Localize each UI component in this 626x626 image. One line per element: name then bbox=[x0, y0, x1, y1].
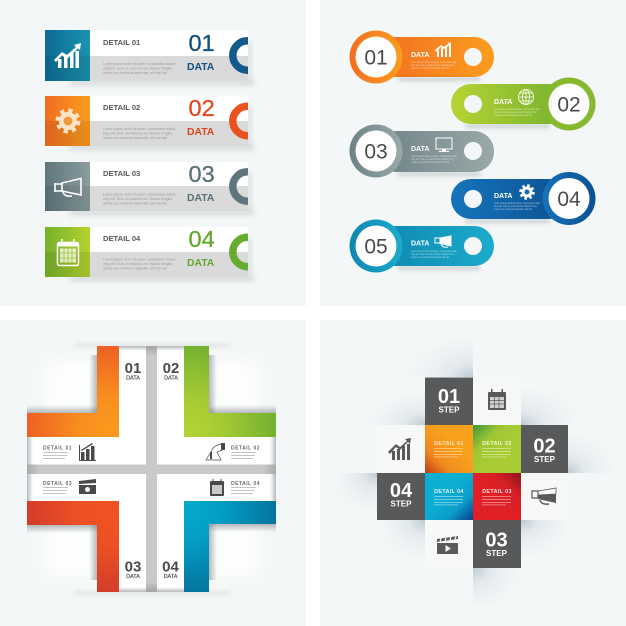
icon: megaphone bbox=[532, 488, 556, 504]
icon: megaphone bbox=[55, 178, 81, 196]
icon: growth chart bbox=[388, 438, 411, 460]
icon: megaphone bbox=[435, 236, 451, 247]
pill 03: DATA bbox=[411, 146, 429, 153]
pill 05 bbox=[350, 220, 494, 272]
tile detail 02 bbox=[473, 425, 521, 473]
pill 03 bbox=[350, 124, 494, 178]
pill 05: DATA bbox=[411, 240, 429, 248]
card 03 bbox=[45, 161, 262, 215]
icon: monitor bbox=[436, 138, 452, 152]
tile 03: 03 bbox=[485, 530, 508, 552]
card 04: 04 bbox=[188, 226, 215, 252]
number labels: 02 bbox=[163, 360, 179, 377]
pill 05: Lorem ipsum dolor sit amet, consectetur adip bbox=[411, 250, 458, 253]
pill 01: 01 bbox=[364, 46, 388, 70]
card 01: cing elit. Duis ut euismod dui. Mauris fringilla, bbox=[103, 66, 173, 70]
card 04: Lorem ipsum dolor sit amet, consectetur adipis bbox=[103, 258, 176, 262]
card 01: Lorem ipsum dolor sit amet, consectetur adipis bbox=[103, 62, 176, 66]
tile detail 03: DETAIL 03 bbox=[482, 489, 512, 495]
panel: detail cards bbox=[45, 30, 262, 281]
ring bbox=[229, 168, 248, 205]
ring bbox=[229, 102, 248, 140]
pill 04: metus nec vehicula imperdiet, elit nisi bbox=[494, 208, 533, 211]
tile 02: STEP bbox=[534, 455, 556, 464]
card 02: cing elit. Duis ut euismod dui. Mauris fringilla, bbox=[103, 132, 173, 136]
icon: calendar bbox=[488, 389, 506, 410]
detail 02: DETAIL 02 bbox=[231, 446, 260, 452]
icon: clapperboard bbox=[79, 479, 96, 494]
icon: gear bbox=[520, 186, 534, 198]
icon: clapperboard bbox=[437, 536, 458, 554]
pill 05: 05 bbox=[364, 236, 388, 258]
card 01: 01 bbox=[188, 30, 215, 56]
card 04 bbox=[45, 226, 262, 281]
detail 03 bbox=[43, 479, 96, 494]
card 01 bbox=[45, 30, 262, 85]
number labels: 03 bbox=[125, 558, 141, 576]
tile 01: 01 bbox=[438, 386, 460, 408]
pill 01 bbox=[350, 30, 494, 84]
tile 03 bbox=[473, 520, 521, 568]
tile 03: STEP bbox=[486, 549, 508, 558]
corner: red bbox=[27, 501, 119, 592]
pill 04 bbox=[451, 172, 596, 225]
tile detail 01: DETAIL 01 bbox=[434, 441, 464, 447]
pill 02: DATA bbox=[494, 99, 512, 106]
ring bbox=[229, 37, 248, 74]
tile detail 04: DETAIL 04 bbox=[434, 489, 464, 495]
corner: orange bbox=[27, 346, 119, 437]
detail 03: DETAIL 03 bbox=[43, 481, 72, 487]
icon: globe bbox=[518, 90, 534, 104]
icon: hand voting bbox=[206, 443, 225, 460]
detail 04 bbox=[210, 479, 260, 496]
number labels: DATA bbox=[164, 376, 178, 382]
pill 01: Lorem ipsum dolor sit amet, consectetur adip bbox=[411, 61, 458, 64]
corner: blue bbox=[184, 501, 276, 592]
number labels bbox=[125, 360, 179, 580]
detail 01 bbox=[43, 443, 96, 461]
corner: green bbox=[184, 346, 276, 437]
tile detail 04 bbox=[425, 473, 473, 520]
tile 04: 04 bbox=[390, 480, 413, 502]
pill 02 bbox=[451, 78, 596, 130]
tile 04: STEP bbox=[391, 500, 412, 508]
pill 05: cing elit. Duis ut euismod dui. Mauris fring bbox=[411, 253, 454, 256]
card 03: metus nec vehicula imperdiet, elit nisi fab bbox=[103, 202, 167, 206]
number labels: DATA bbox=[126, 376, 140, 382]
tile 04 bbox=[377, 473, 425, 520]
card 01: metus nec vehicula imperdiet, elit nisi fab bbox=[103, 71, 167, 75]
card 01: DETAIL 01 bbox=[103, 38, 141, 47]
panel: cross layout bbox=[27, 344, 276, 594]
icon: growth chart bbox=[54, 43, 81, 68]
card 04: metus nec vehicula imperdiet, elit nisi fab bbox=[103, 266, 167, 270]
icon: calendar bbox=[58, 239, 78, 266]
pill 03: cing elit. Duis ut euismod dui. Mauris fring bbox=[411, 158, 454, 161]
tile 02 bbox=[521, 425, 568, 473]
pill 02: 02 bbox=[557, 94, 581, 116]
card 04: DETAIL 04 bbox=[103, 234, 141, 243]
detail 02 bbox=[206, 443, 260, 460]
card 03: DETAIL 03 bbox=[103, 169, 140, 178]
pill 05: metus nec vehicula imperdiet, elit nisi bbox=[411, 256, 450, 259]
card 02: Lorem ipsum dolor sit amet, consectetur adipis bbox=[103, 127, 176, 131]
icon: chart bbox=[435, 42, 451, 57]
card 03: Lorem ipsum dolor sit amet, consectetur adipis bbox=[103, 192, 176, 196]
card 03: cing elit. Duis ut euismod dui. Mauris fringilla, bbox=[103, 197, 173, 201]
number labels: 04 bbox=[162, 558, 179, 576]
cross background and shadows bbox=[27, 344, 276, 594]
icon: calendar bbox=[210, 479, 224, 496]
card 02: DETAIL 02 bbox=[103, 103, 140, 112]
pill 02: metus nec vehicula imperdiet, elit nisi bbox=[494, 114, 533, 117]
grey divider bars bbox=[27, 346, 276, 592]
background shadows bbox=[348, 351, 600, 596]
pill 03: metus nec vehicula imperdiet, elit nisi bbox=[411, 161, 450, 164]
card 04: DATA bbox=[187, 258, 215, 269]
detail 04: DETAIL 04 bbox=[231, 481, 260, 487]
card 04: cing elit. Duis ut euismod dui. Mauris fringilla, bbox=[103, 262, 173, 266]
icon: gear bbox=[58, 110, 78, 132]
pill 04: Lorem ipsum dolor sit amet, consectetur adip bbox=[494, 202, 541, 205]
card 03: DATA bbox=[187, 193, 215, 204]
card 02: 02 bbox=[188, 95, 215, 121]
card 02: DATA bbox=[187, 127, 215, 138]
tile 02: 02 bbox=[533, 436, 556, 458]
pill 03: Lorem ipsum dolor sit amet, consectetur adip bbox=[411, 155, 458, 158]
ring bbox=[229, 234, 248, 270]
tile detail 01 bbox=[425, 425, 473, 473]
pill 01: DATA bbox=[411, 52, 429, 59]
icon: bar chart bbox=[79, 443, 96, 461]
pill 01: cing elit. Duis ut euismod dui. Mauris fring bbox=[411, 64, 454, 67]
card 03: 03 bbox=[188, 161, 215, 187]
card 01: DATA bbox=[187, 62, 215, 73]
pill 02: cing elit. Duis ut euismod dui. Mauris fring bbox=[494, 111, 537, 114]
tile 01 bbox=[425, 378, 473, 425]
panel: step grid bbox=[348, 351, 600, 596]
pill 04: 04 bbox=[557, 188, 581, 211]
card 02: metus nec vehicula imperdiet, elit nisi fab bbox=[103, 136, 167, 140]
number labels: DATA bbox=[126, 574, 140, 580]
detail 01: DETAIL 01 bbox=[43, 446, 72, 452]
number labels: 01 bbox=[125, 360, 141, 377]
card 02 bbox=[45, 95, 262, 150]
number labels: DATA bbox=[164, 574, 178, 580]
pill 04: DATA bbox=[494, 193, 512, 200]
pill 04: cing elit. Duis ut euismod dui. Mauris fring bbox=[494, 205, 537, 208]
pill 02: Lorem ipsum dolor sit amet, consectetur adip bbox=[494, 108, 541, 111]
tile detail 02: DETAIL 02 bbox=[482, 441, 512, 447]
pill 03: 03 bbox=[364, 140, 388, 164]
tile detail 03 bbox=[473, 473, 521, 520]
pill 01: metus nec vehicula imperdiet, elit nisi bbox=[411, 67, 450, 70]
panel: numbered pills bbox=[350, 30, 596, 272]
tile 01: STEP bbox=[439, 406, 460, 414]
